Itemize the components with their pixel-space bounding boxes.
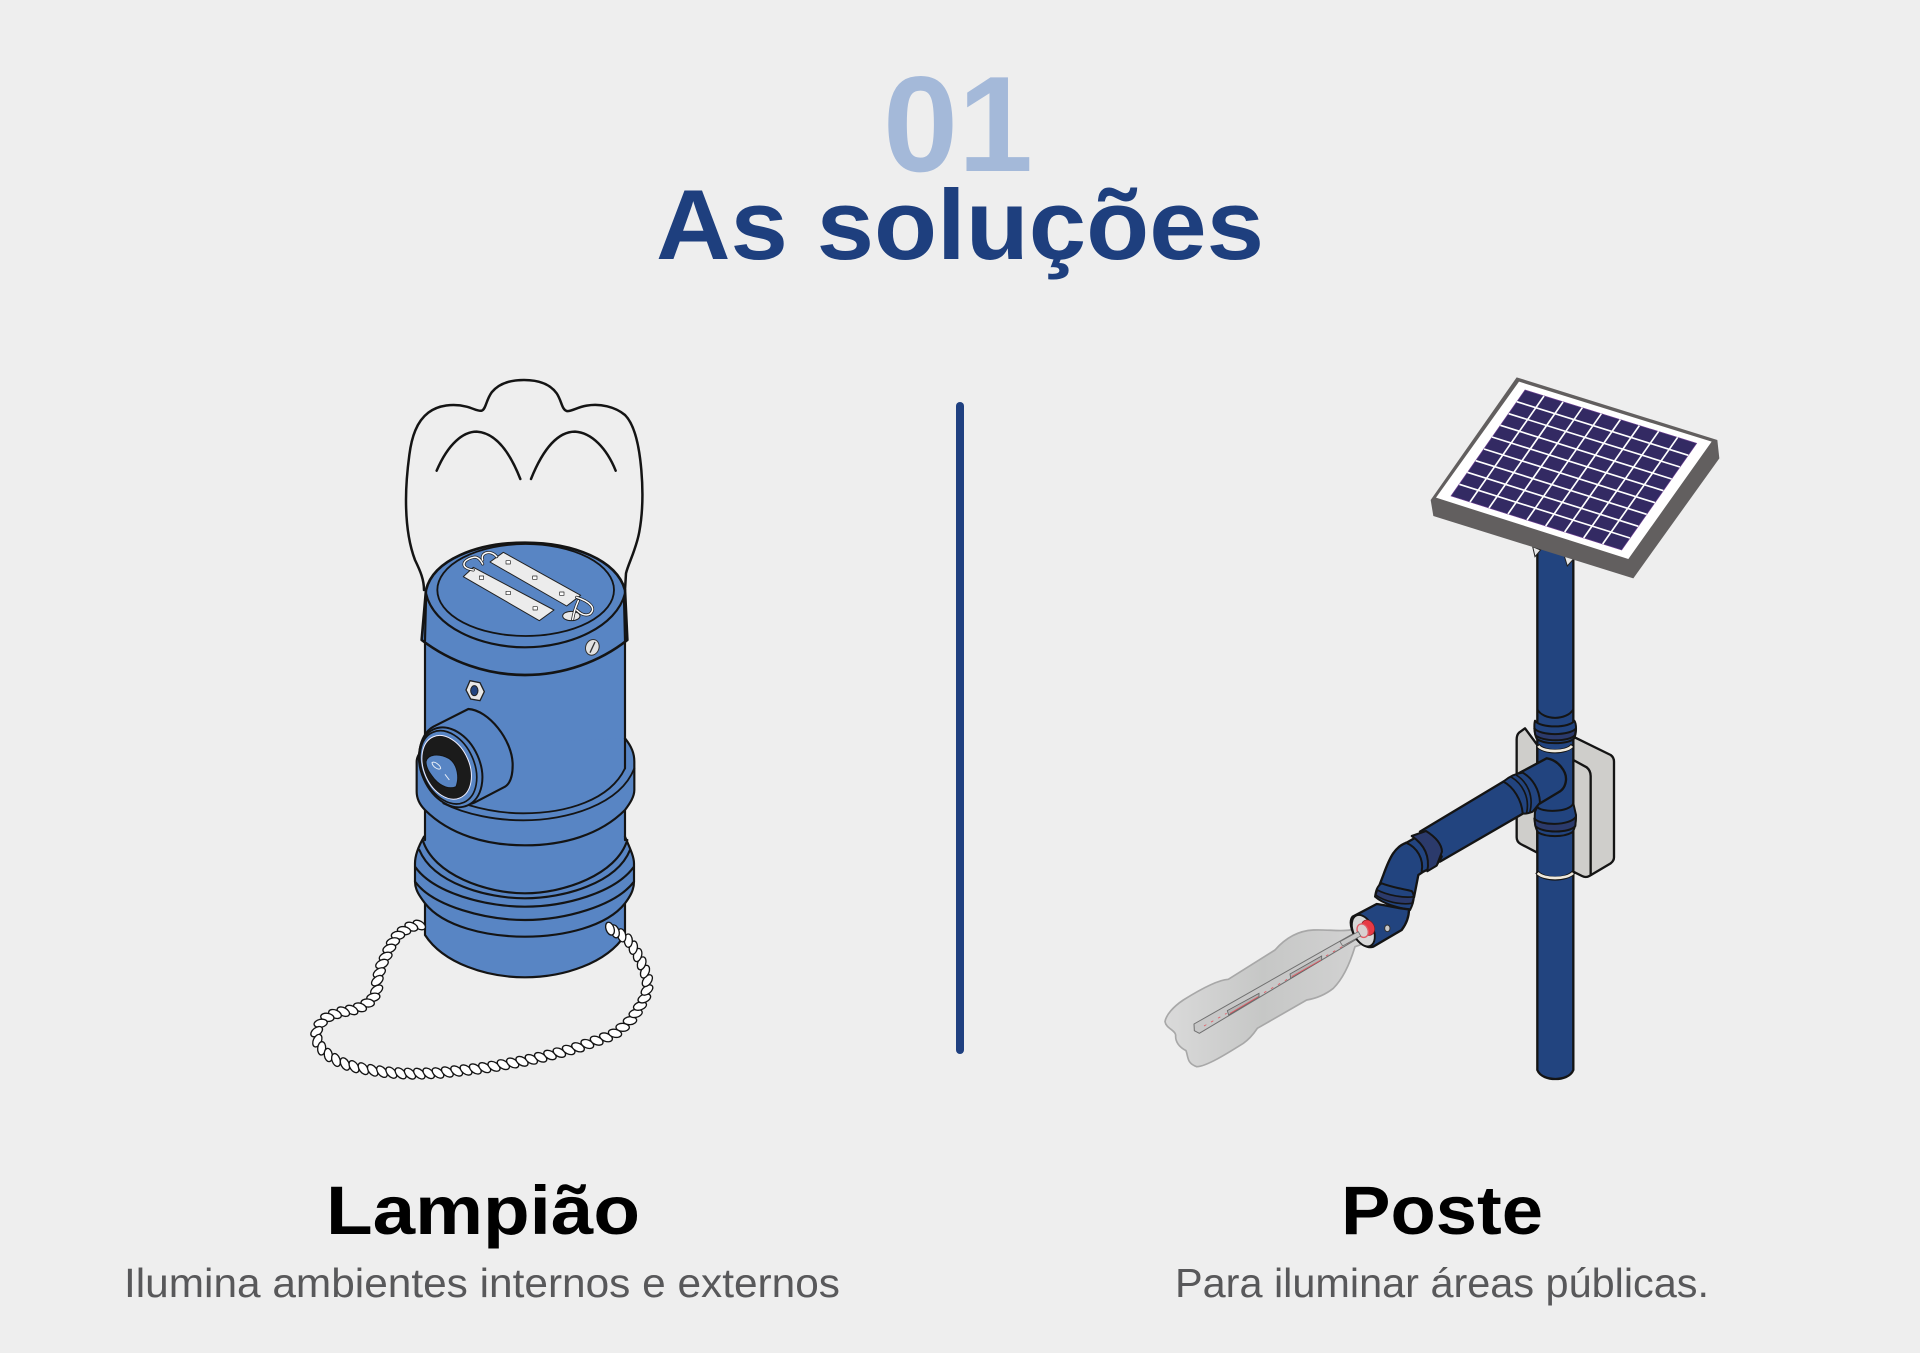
rope [317,925,647,1074]
bottle inner curves [437,432,616,479]
end tube [1351,904,1409,947]
panel brackets [1533,547,1575,566]
panel body [1431,377,1719,578]
rocker [426,755,458,788]
lower clamp band [1537,872,1574,878]
cylinder right edge [622,627,628,768]
switch [407,709,513,817]
bottle outline [406,380,642,590]
arm [1420,758,1566,862]
elbow inner curve [1406,843,1422,871]
photovoltaic cells [1451,390,1697,550]
screw [583,638,601,657]
elbow collar [1412,831,1442,871]
led rail [1194,932,1361,1033]
mid body edges [425,640,625,840]
illustration: lantern [317,380,647,1074]
lower cylinder [425,903,625,977]
lower ring [415,837,634,937]
upper clamp band [1538,745,1573,751]
tube screw [1385,925,1390,932]
lower elbow band [1376,890,1414,904]
elbow [1377,832,1442,897]
label: pole description: Para iluminar áreas públicas. [1175,1260,1709,1306]
lower collar [1534,803,1576,836]
led segments [1227,956,1322,1015]
mounting plate [1517,728,1614,877]
pole [1537,540,1573,1079]
switch housing [419,709,513,805]
upper ring [417,738,634,845]
title: As soluções [656,169,1264,280]
upper clamp band highlight [1538,746,1572,751]
label: pole heading: Poste [1341,1172,1543,1249]
led lights [1204,942,1350,1026]
led strips [463,552,581,621]
rocker marks [432,762,449,780]
water bottle with led strip [1165,930,1361,1067]
led wires [464,553,593,619]
upper ring grooves [443,768,634,820]
bottle [1165,930,1360,1067]
collar grooves [1512,775,1531,813]
panel white frame [1436,382,1712,559]
pole assembly [1340,540,1614,1079]
end face [1347,911,1379,950]
switch face rings [407,717,494,817]
lower elbow collar [1375,883,1414,910]
red fitting [1340,918,1377,946]
body fill [425,593,625,913]
divider [956,402,964,1054]
solar panel [1431,377,1719,578]
section number: 01 [883,48,1033,200]
top collar [1534,709,1576,743]
lower ring outline and grooves [415,837,634,937]
cap inner ellipse [437,544,614,636]
upper ring outline [417,738,634,845]
cell grid [1459,396,1688,544]
cap lower edge [425,593,625,647]
switch face inner ring [409,722,488,813]
cap [422,543,627,675]
lower clamp band highlight [1538,873,1573,878]
illustration: solar street light [1165,377,1719,1079]
label: lantern heading: Lampião [326,1172,640,1249]
nut [466,681,484,701]
switch black bezel [412,728,481,807]
label: lantern description: Ilumina ambientes internos e externos [124,1260,840,1306]
arm junction collar [1503,773,1540,814]
